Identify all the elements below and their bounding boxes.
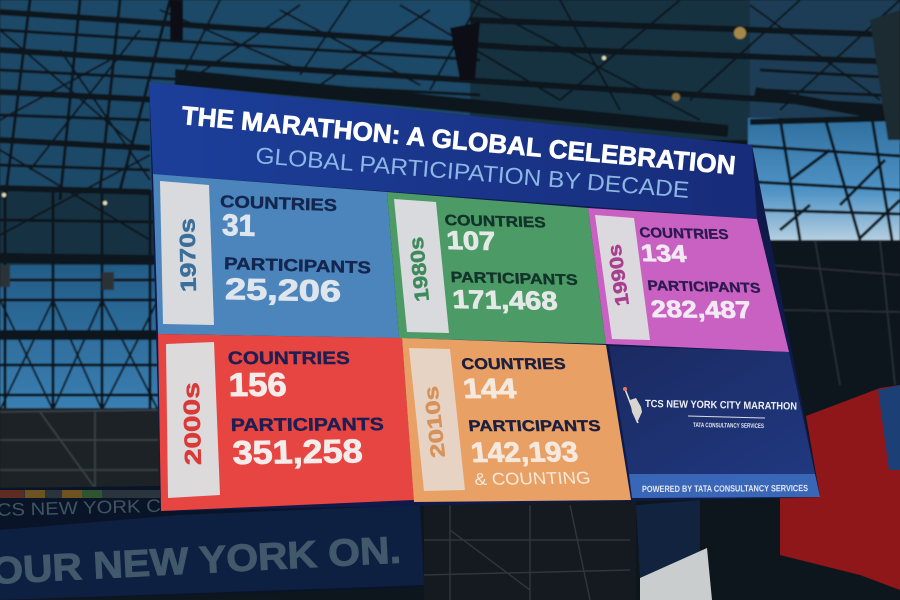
decade tab (394, 199, 449, 333)
countries number: 134 (640, 240, 688, 268)
lower left banner (0, 486, 424, 600)
sponsor rule (688, 416, 765, 418)
countries label: COUNTRIES (461, 356, 566, 373)
decade tab (595, 215, 650, 340)
participants label: PARTICIPANTS (468, 418, 601, 435)
panel: 1980s (387, 192, 606, 344)
participants number: 282,487 (649, 296, 753, 324)
icon: Statue of Liberty (623, 387, 642, 423)
participants number: 171,468 (451, 284, 558, 316)
participants number: 25,206 (225, 273, 341, 308)
header panel (149, 82, 757, 219)
banner slogan: OUR NEW YORK ON. (0, 530, 402, 593)
participants label: PARTICIPANTS (230, 414, 384, 435)
sponsor name: TCS NEW YORK CITY MARATHON (645, 398, 797, 413)
footer band (629, 474, 820, 498)
participants number: 142,193 (469, 436, 580, 468)
participants label: PARTICIPANTS (450, 269, 578, 289)
countries label: COUNTRIES (444, 212, 546, 231)
footer text: POWERED BY TATA CONSULTANCY SERVICES (642, 483, 808, 494)
countries label: COUNTRIES (220, 192, 337, 215)
decade label: 1990s (605, 243, 634, 307)
participants label: PARTICIPANTS (646, 277, 761, 296)
panel: 1970s (153, 174, 399, 338)
decade tab (160, 181, 214, 325)
blue banner on right wall (878, 385, 900, 470)
countries number: 31 (222, 209, 255, 243)
decade tab (166, 342, 220, 498)
decade label: 2000s (178, 382, 206, 466)
banner small text: CS NEW YORK C (0, 496, 161, 520)
panel: 2000s (158, 334, 414, 511)
countries number: 144 (461, 373, 518, 404)
panel: 1990s (588, 208, 789, 352)
countries label: COUNTRIES (228, 348, 350, 368)
subtitle: GLOBAL PARTICIPATION BY DECADE (255, 142, 690, 203)
red wall at right (780, 385, 900, 590)
decade label: 2010s (421, 385, 450, 459)
decade label: 1970s (174, 218, 201, 292)
decade tab (409, 348, 465, 491)
countries number: 107 (445, 225, 496, 256)
panel: 2010s (402, 338, 631, 502)
sponsor sub-line: TATA CONSULTANCY SERVICES (693, 422, 765, 430)
participants number: 351,258 (232, 432, 363, 471)
title: THE MARATHON: A GLOBAL CELEBRATION (180, 100, 737, 180)
and counting note: & COUNTING (473, 468, 591, 489)
panel: TCS sponsor (609, 346, 815, 474)
participants label: PARTICIPANTS (224, 254, 371, 277)
lower centre structure (424, 500, 712, 600)
countries label: COUNTRIES (638, 224, 729, 242)
screen base (149, 82, 820, 511)
countries number: 156 (228, 366, 287, 403)
LED screen (149, 82, 820, 511)
decade label: 1980s (406, 236, 434, 303)
